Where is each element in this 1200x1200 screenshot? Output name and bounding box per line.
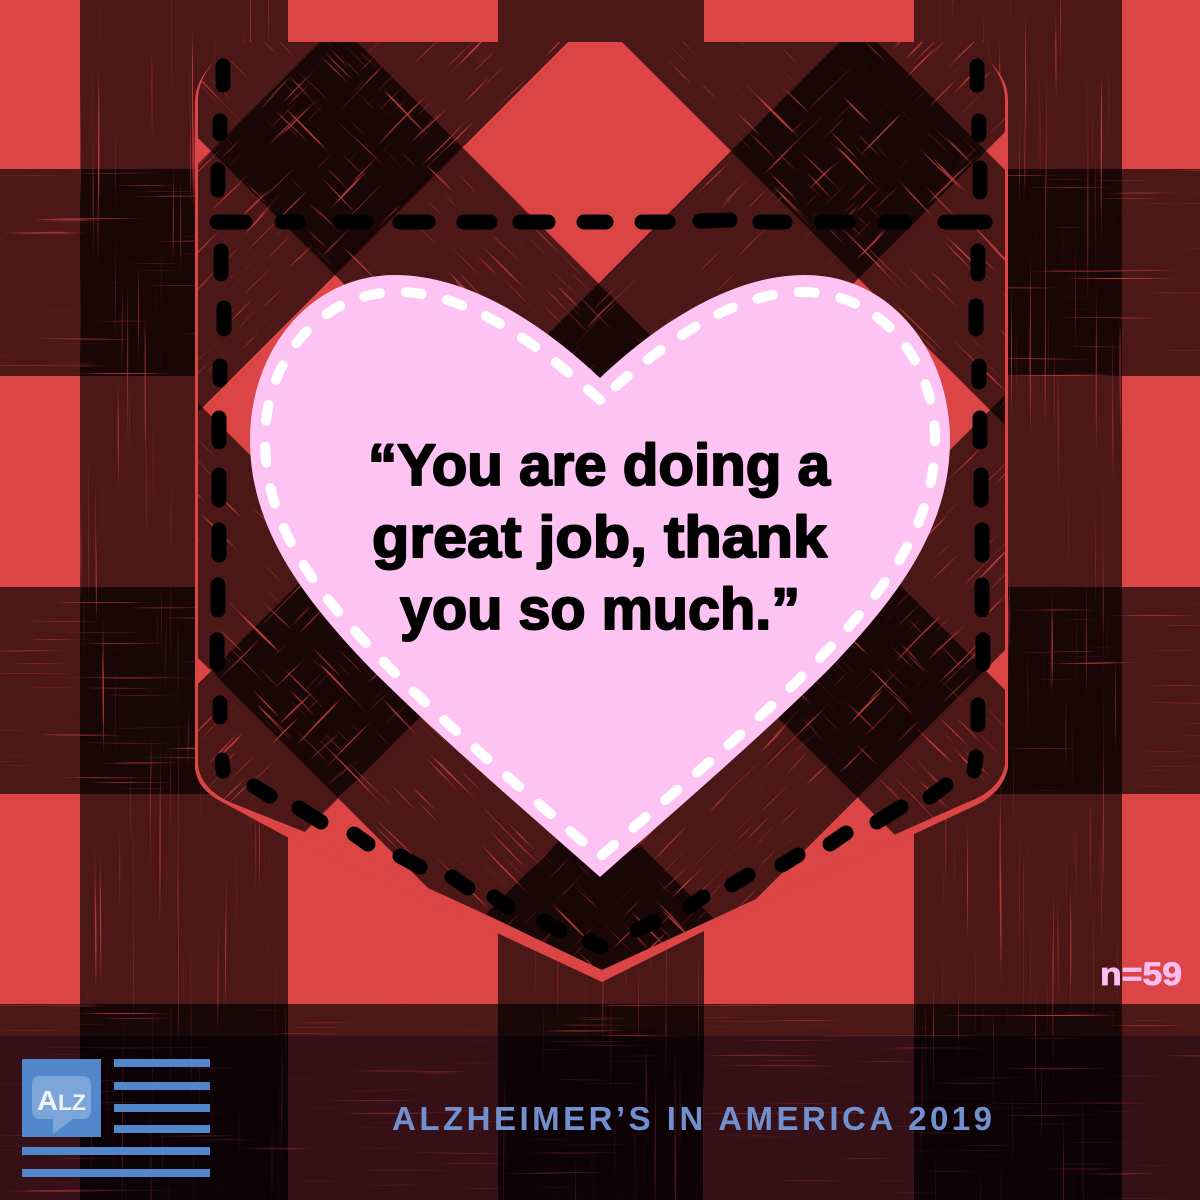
black pocket stitching xyxy=(217,66,985,947)
footer title: ALZHEIMER’S IN AMERICA 2019 xyxy=(392,1100,992,1137)
logo: Alz flag xyxy=(22,1059,210,1177)
heart note xyxy=(250,275,950,877)
quote text: you so much.” xyxy=(400,577,800,642)
footer dark strip xyxy=(0,1036,1200,1200)
heart white stitching xyxy=(265,292,935,857)
logo text: ALZ xyxy=(37,1085,86,1116)
sample size label: n=59 xyxy=(1100,956,1182,992)
pocket diagonal plaid fabric xyxy=(198,42,1005,970)
logo speech bubble xyxy=(32,1076,91,1134)
heart shape xyxy=(250,275,950,877)
quote text xyxy=(368,433,831,642)
shirt pocket xyxy=(195,42,1008,982)
quote text: great job, thank xyxy=(372,505,828,570)
quote text: “You are doing a xyxy=(368,433,831,498)
pocket red outline xyxy=(195,42,1008,982)
